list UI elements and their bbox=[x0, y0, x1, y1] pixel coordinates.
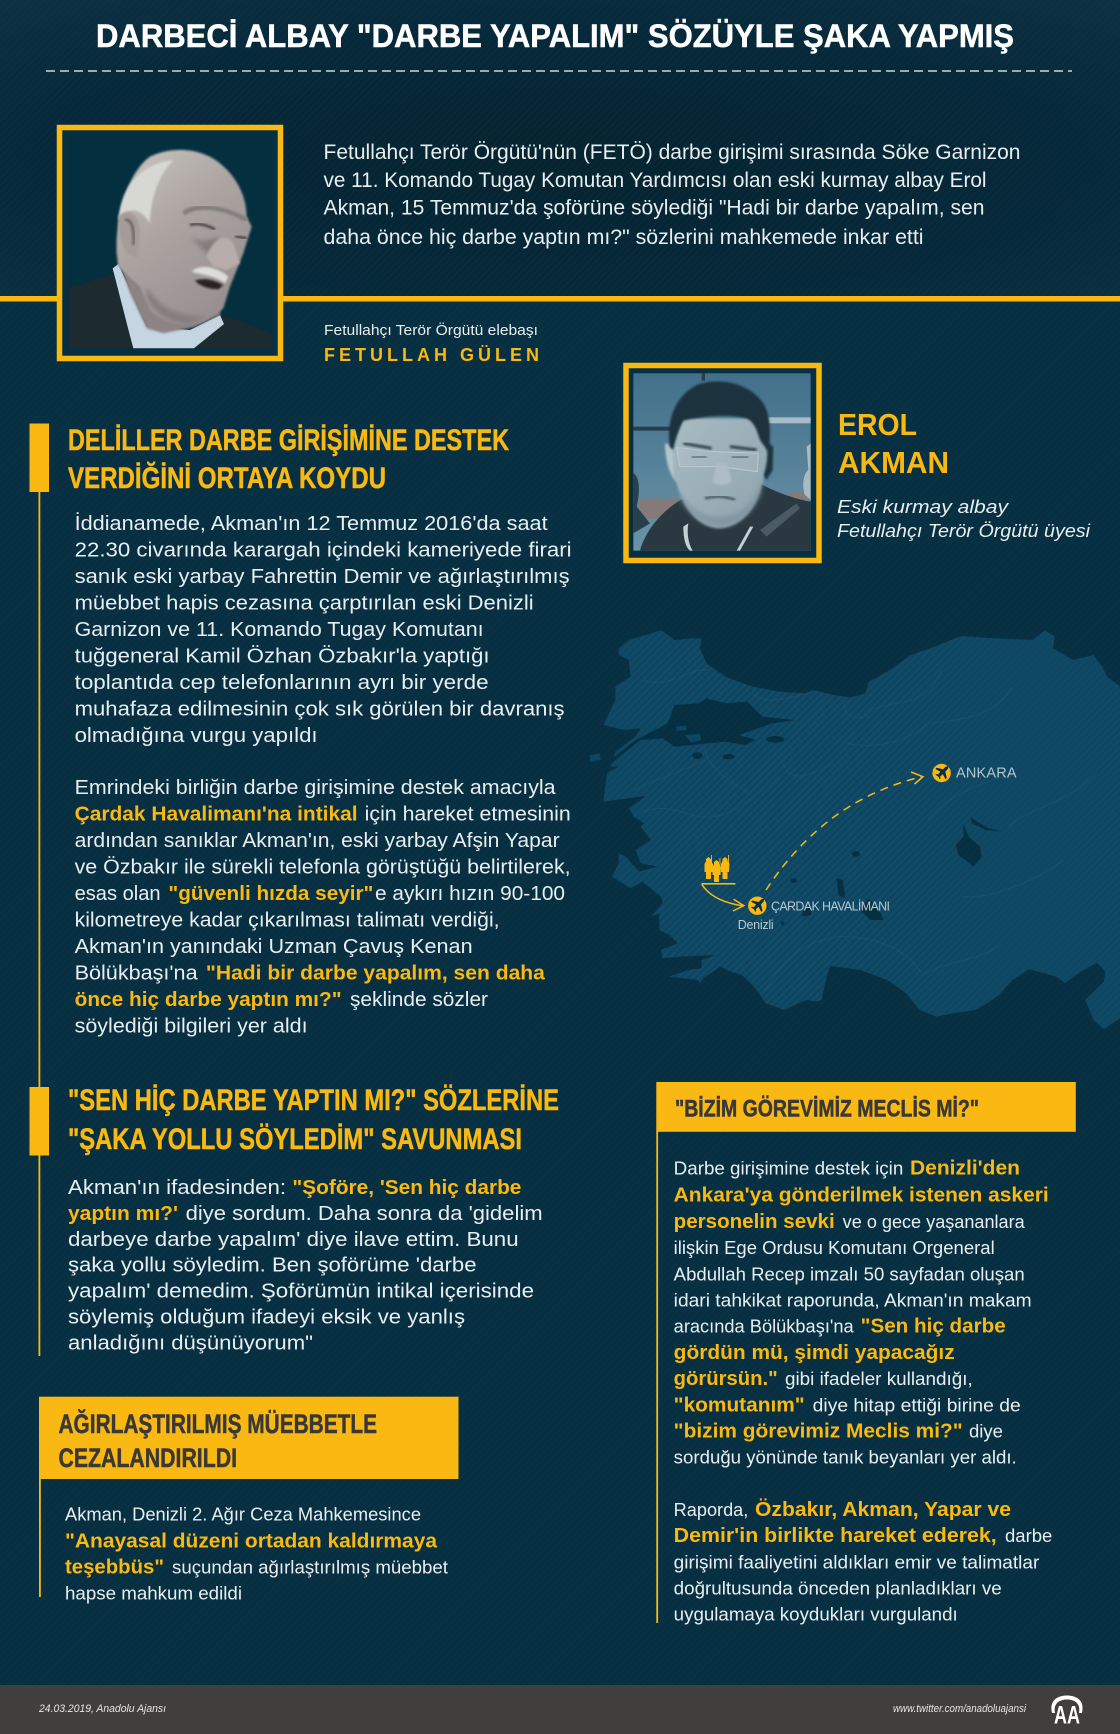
text block: paragraph 2: Akman'ın yanındaki Uzman Çavuş Kenan bbox=[75, 936, 473, 958]
text block: paragraph 2: esas olan bbox=[75, 883, 161, 905]
text block: sentence: teşebbüs" bbox=[65, 1556, 164, 1578]
text block: report: doğrultusunda önceden planladıkları ve bbox=[674, 1579, 1002, 1599]
text block: report: aracında Bölükbaşı'na bbox=[674, 1317, 855, 1337]
heading box: AĞIRLAŞTIRILMIŞ MÜEBBETLE bbox=[58, 1408, 377, 1439]
footer bbox=[0, 1685, 1120, 1734]
text block: paragraph 2: "Hadi bir darbe yapalım, sen daha bbox=[206, 962, 546, 984]
text block: testimony: yapalım' demedim. Şoförümün intikal içerisinde bbox=[68, 1280, 534, 1302]
text block: report: idari tahkikat raporunda, Akman'ın makam bbox=[674, 1290, 1032, 1310]
map annotations bbox=[702, 764, 1017, 932]
text block: report: girişimi faaliyetini aldıkları emir ve talimatlar bbox=[674, 1553, 1039, 1573]
text block: paragraph 2: Çardak Havalimanı'na intikal bbox=[75, 804, 358, 826]
heading: evidence bbox=[68, 424, 509, 495]
icon: AA logo: AA bbox=[1054, 1702, 1080, 1730]
heading: defence bbox=[68, 1084, 559, 1156]
text block: testimony: darbeye darbe yapalım' diye ilave ettim. Bunu bbox=[68, 1229, 519, 1251]
text block: report: Raporda, bbox=[674, 1500, 748, 1520]
panel: evidence section bbox=[30, 424, 572, 1356]
footer: twitter link: www.twitter.com/anadoluajansi bbox=[893, 1703, 1026, 1715]
text block: report: Abdullah Recep imzalı 50 sayfadan oluşan bbox=[674, 1264, 1025, 1284]
timeline bar bbox=[656, 1131, 658, 1623]
caption: Fetullah Gülen bbox=[324, 321, 539, 365]
heading: evidence: DELİLLER DARBE GİRİŞİMİNE DESTEK bbox=[68, 424, 509, 457]
heading box bbox=[656, 1082, 1076, 1132]
text block: testimony bbox=[68, 1177, 543, 1354]
text block: paragraph 1: 22.30 civarında karargah içindeki kameriyede firari bbox=[75, 540, 572, 562]
text block: report: personelin sevki bbox=[674, 1211, 835, 1233]
icon: Ankara airport bbox=[932, 764, 951, 782]
timeline bar bbox=[38, 490, 40, 1356]
heading: defence: "ŞAKA YOLLU SÖYLEDİM" SAVUNMASI bbox=[68, 1123, 522, 1156]
name block: Erol Akman: EROL bbox=[838, 407, 917, 442]
heading box: "BİZİM GÖREVİMİZ MECLİS Mİ?" bbox=[675, 1096, 979, 1123]
text block: report: "komutanım" bbox=[674, 1394, 805, 1416]
text block: report: gibi ifadeler kullandığı, bbox=[785, 1369, 973, 1389]
text block: paragraph 2: e aykırı hızın 90-100 bbox=[375, 883, 565, 905]
text block: testimony: Akman'ın ifadesinden: bbox=[68, 1177, 286, 1199]
text block: paragraph 1: tuğgeneral Kamil Özhan Özbakır'la yaptığı bbox=[75, 646, 490, 668]
name block: Erol Akman bbox=[837, 407, 1091, 541]
text block: paragraph 1: müebbet hapis cezasına çarptırılan eski Denizli bbox=[75, 592, 534, 614]
portrait: Fetullah Gülen bbox=[60, 128, 280, 358]
text block: report: uygulamaya koydukları vurgulandı bbox=[674, 1604, 958, 1624]
text block: report: "bizim görevimiz Meclis mi?" bbox=[674, 1420, 963, 1442]
text block: report bbox=[674, 1158, 1052, 1624]
text block: report: ve o gece yaşananlara bbox=[843, 1212, 1026, 1232]
marker bbox=[30, 1087, 49, 1156]
text block: sentence bbox=[65, 1505, 448, 1603]
text block: sentence: hapse mahkum edildi bbox=[65, 1583, 242, 1603]
horizontal yellow rule bbox=[0, 296, 1120, 302]
label: Ankara: ANKARA bbox=[956, 766, 1017, 782]
caption: Fetullah Gülen: Fetullahçı Terör Örgütü elebaşı bbox=[324, 321, 538, 339]
intro text: ve 11. Komando Tugay Komutan Yardımcısı olan eski kurmay albay Erol bbox=[324, 169, 986, 192]
text block: report: ilişkin Ege Ordusu Komutanı Orgeneral bbox=[674, 1238, 995, 1258]
text block: report: diye bbox=[969, 1421, 1003, 1441]
caption: Fetullah Gülen: FETULLAH GÜLEN bbox=[324, 345, 539, 365]
text block: testimony: "Şoföre, 'Sen hiç darbe bbox=[292, 1177, 521, 1199]
heading: evidence: VERDİĞİNİ ORTAYA KOYDU bbox=[68, 461, 386, 495]
text block: paragraph 2: ardından sanıklar Akman'ın, eski yarbay Afşin Yapar bbox=[75, 830, 560, 852]
text block: testimony: diye sordum. Daha sonra da 'gidelim bbox=[186, 1203, 543, 1225]
heading box: CEZALANDIRILDI bbox=[58, 1443, 237, 1473]
heading box bbox=[39, 1397, 458, 1479]
name block: Erol Akman: Fetullahçı Terör Örgütü üyesi bbox=[837, 521, 1091, 541]
text block: testimony: yaptın mı?' bbox=[68, 1203, 178, 1225]
text block: paragraph 2 bbox=[75, 777, 571, 1038]
icon: AA logo bbox=[1051, 1696, 1083, 1730]
text block: paragraph 1: toplantıda cep telefonlarının ayrı bir yerde bbox=[75, 672, 489, 694]
intro text: daha önce hiç darbe yaptın mı?" sözlerini mahkemede inkar etti bbox=[324, 226, 923, 249]
text block: report: Özbakır, Akman, Yapar ve bbox=[755, 1498, 1011, 1521]
text block: report: Denizli'den bbox=[910, 1158, 1020, 1180]
text block: paragraph 2: için hareket etmesinin bbox=[365, 804, 571, 826]
text block: paragraph 2: "güvenli hızda seyir" bbox=[168, 883, 373, 905]
text block: testimony: şaka yollu söyledim. Ben şoförüme 'darbe bbox=[68, 1255, 476, 1277]
text block: paragraph 2: kilometreye kadar çıkarılması talimatı verdiği, bbox=[75, 910, 500, 932]
arrow: to Çardak bbox=[702, 884, 744, 911]
intro text bbox=[324, 141, 1020, 249]
text block: testimony: anladığını düşünüyorum" bbox=[68, 1332, 313, 1354]
name block: Erol Akman: Eski kurmay albay bbox=[837, 497, 1009, 517]
text block: testimony: söylemiş olduğum ifadeyi eksik ve yanlış bbox=[68, 1306, 465, 1328]
text block: report: diye hitap ettiği birine de bbox=[813, 1396, 1021, 1416]
text block: sentence: Akman, Denizli 2. Ağır Ceza Mahkemesince bbox=[65, 1505, 421, 1525]
text block: paragraph 1: Garnizon ve 11. Komando Tugay Komutanı bbox=[75, 619, 484, 641]
icon: Çardak airport bbox=[748, 896, 766, 915]
text block: paragraph 1: İddianamede, Akman'ın 12 Temmuz 2016'da saat bbox=[75, 512, 548, 535]
text block: sentence: "Anayasal düzeni ortadan kaldırmaya bbox=[65, 1531, 438, 1553]
background: top section bbox=[0, 0, 1120, 296]
text block: report: Darbe girişimine destek için bbox=[674, 1159, 903, 1179]
text block: paragraph 1 bbox=[75, 512, 572, 747]
text block: paragraph 2: şeklinde sözler bbox=[350, 989, 488, 1011]
text block: paragraph 1: muhafaza edilmesinin çok sık görülen bir davranış bbox=[75, 698, 565, 720]
label: Çardak Havalimanı: ÇARDAK HAVALİMANI bbox=[771, 900, 890, 914]
text block: paragraph 1: sanık eski yarbay Fahrettin Demir ve ağırlaştırılmış bbox=[75, 566, 570, 588]
text block: report: görürsün." bbox=[674, 1368, 778, 1390]
panel: joke defence section bbox=[30, 1084, 559, 1354]
map of Turkey bbox=[590, 630, 1120, 1029]
text block: report: Ankara'ya gönderilmek istenen askeri bbox=[674, 1184, 1049, 1206]
heading: defence: "SEN HİÇ DARBE YAPTIN MI?" SÖZLERİNE bbox=[68, 1084, 559, 1117]
text block: paragraph 2: söylediği bilgileri yer aldı bbox=[75, 1016, 308, 1038]
text block: report: Demir'in birlikte hareket ederek, bbox=[674, 1525, 997, 1547]
text block: paragraph 2: ve Özbakır ile sürekli telefonla görüştüğü belirtilerek, bbox=[75, 856, 571, 878]
text block: report: darbe bbox=[1005, 1526, 1052, 1546]
text block: paragraph 2: Emrindeki birliğin darbe girişimine destek amacıyla bbox=[75, 777, 557, 799]
icon: soldiers bbox=[702, 855, 735, 885]
label: Denizli: Denizli bbox=[738, 918, 774, 932]
text block: report: gördün mü, şimdi yapacağız bbox=[674, 1342, 955, 1364]
marker bbox=[30, 424, 49, 492]
title: DARBECİ ALBAY "DARBE YAPALIM" SÖZÜYLE ŞAKA YAPMIŞ bbox=[96, 18, 1014, 54]
text block: report: "Sen hiç darbe bbox=[861, 1316, 1006, 1338]
text block: sentence: suçundan ağırlaştırılmış müebbet bbox=[172, 1558, 448, 1578]
intro text: Fetullahçı Terör Örgütü'nün (FETÖ) darbe girişimi sırasında Söke Garnizon bbox=[324, 141, 1020, 164]
text block: paragraph 2: Bölükbaşı'na bbox=[75, 962, 199, 984]
timeline bar bbox=[39, 1479, 41, 1597]
text block: paragraph 1: olmadığına vurgu yapıldı bbox=[75, 725, 318, 747]
name block: Erol Akman: AKMAN bbox=[838, 445, 949, 480]
portrait: Erol Akman bbox=[626, 366, 819, 560]
footer: date and source: 24.03.2019, Anadolu Ajansı bbox=[38, 1703, 166, 1715]
text block: paragraph 2: önce hiç darbe yaptın mı?" bbox=[75, 989, 342, 1011]
intro text: Akman, 15 Temmuz'da şoförüne söylediği "Hadi bir darbe yapalım, sen bbox=[324, 196, 984, 220]
arrow: Çardak to Ankara bbox=[766, 772, 923, 890]
panel: sentence section bbox=[39, 1397, 458, 1603]
panel: Meclis section bbox=[656, 1082, 1076, 1624]
text block: report: sorduğu yönünde tanık beyanları yer aldı. bbox=[674, 1447, 1017, 1467]
